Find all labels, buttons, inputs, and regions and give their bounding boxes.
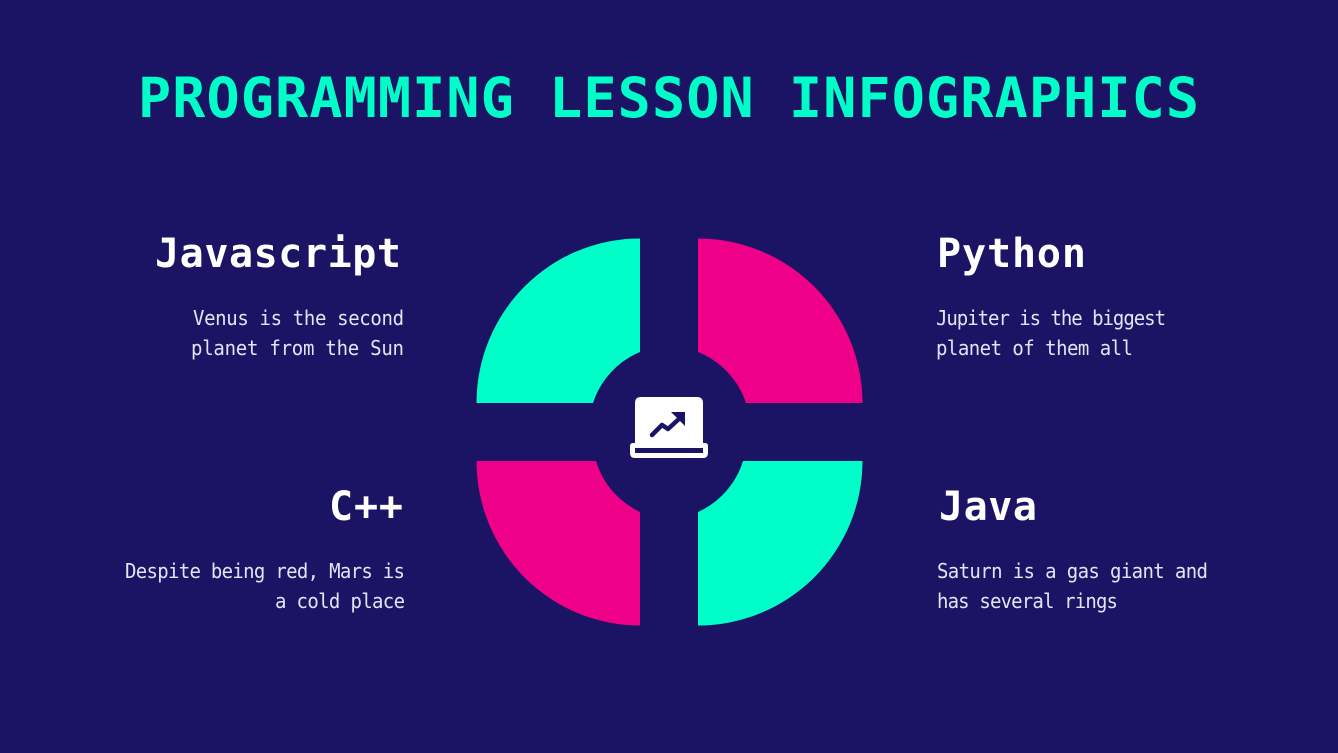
text: Java description: Saturn is a gas giant and [937,559,1208,583]
text: Java description [937,559,1208,613]
text: Python description: Jupiter is the biggest [936,306,1166,330]
block: C++ [125,484,405,613]
text: C++ description: Despite being red, Mars is [125,559,405,583]
text: Python description: planet of them all [936,336,1133,360]
heading: C++: C++ [329,484,403,530]
heading: Java: Java [939,484,1037,530]
segment: top right [698,238,862,403]
text: Java description: has several rings [937,589,1118,613]
heading: Python: Python [937,231,1086,277]
text: Javascript description [191,306,404,360]
text: C++ description: a cold place [275,589,405,613]
text: Python description [936,306,1166,360]
segment: bottom left [476,461,640,626]
block: Python [936,231,1166,360]
title: PROGRAMMING LESSON INFOGRAPHICS [138,66,1199,130]
heading: Javascript: Javascript [155,231,401,277]
block: Javascript [155,231,404,360]
text: Javascript description: planet from the Sun [191,336,404,360]
text: C++ description [125,559,405,613]
segment: top left [476,238,640,403]
block: Java [937,484,1208,613]
icon: laptop with rising chart [630,397,708,458]
segment: bottom right [698,461,862,626]
ring chart [476,238,862,626]
text: Javascript description: Venus is the second [193,306,404,330]
